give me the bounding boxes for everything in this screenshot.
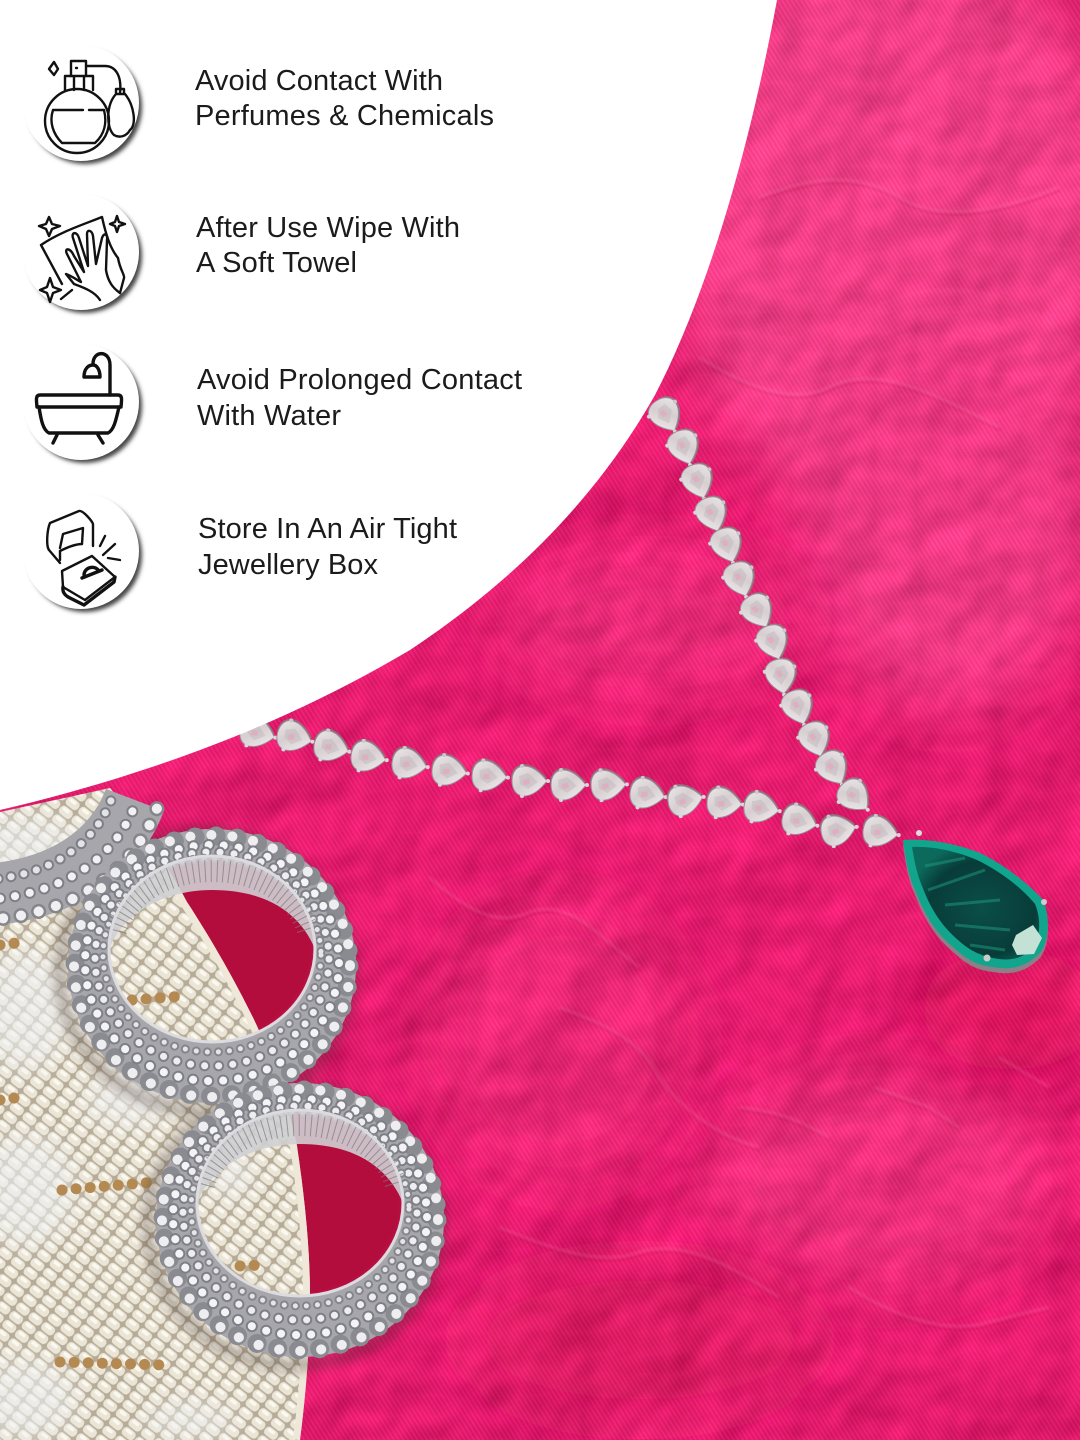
text: avoid perfumes — [195, 65, 494, 132]
text: avoid water: Avoid Prolonged Contact — [197, 364, 522, 396]
text: wipe with towel: A Soft Towel — [196, 247, 357, 279]
text: avoid water: With Water — [197, 400, 341, 432]
text: avoid water — [197, 364, 522, 432]
necklace: right strand — [642, 391, 904, 852]
care item 2: wipe with towel — [23, 194, 460, 313]
text: store in box: Jewellery Box — [198, 549, 378, 581]
white curved panel — [0, 0, 777, 810]
text: store in box — [198, 513, 457, 581]
icon badge: bathtub — [23, 344, 142, 463]
text: avoid perfumes: Avoid Contact With — [195, 65, 443, 97]
bangle 1 — [68, 829, 356, 1103]
bangle hole shading on fabric — [109, 856, 403, 1296]
gold beads — [0, 942, 262, 1365]
top partial bangle — [0, 798, 160, 920]
beaded fabric piece — [0, 770, 330, 1440]
icon badge: ring box — [23, 493, 142, 612]
care item 4: store in box — [23, 493, 457, 612]
text: store in box: Store In An Air Tight — [198, 513, 457, 545]
text: avoid perfumes: Perfumes & Chemicals — [195, 100, 494, 132]
necklace: left strand — [235, 712, 862, 850]
fabric creases — [429, 180, 1060, 1329]
care item 3: avoid water — [23, 344, 522, 463]
text: wipe with towel — [196, 212, 460, 279]
icon badge: hand and towel — [23, 194, 142, 313]
icon badge: perfume bottle — [23, 45, 142, 164]
iridescent sequins — [0, 815, 252, 1440]
care item 1: perfumes and chemicals — [23, 45, 494, 164]
emerald pendant — [903, 830, 1048, 973]
bangle cast shadows — [60, 833, 440, 1365]
bangle 2 — [156, 1083, 444, 1357]
text: wipe with towel: After Use Wipe With — [196, 212, 460, 244]
